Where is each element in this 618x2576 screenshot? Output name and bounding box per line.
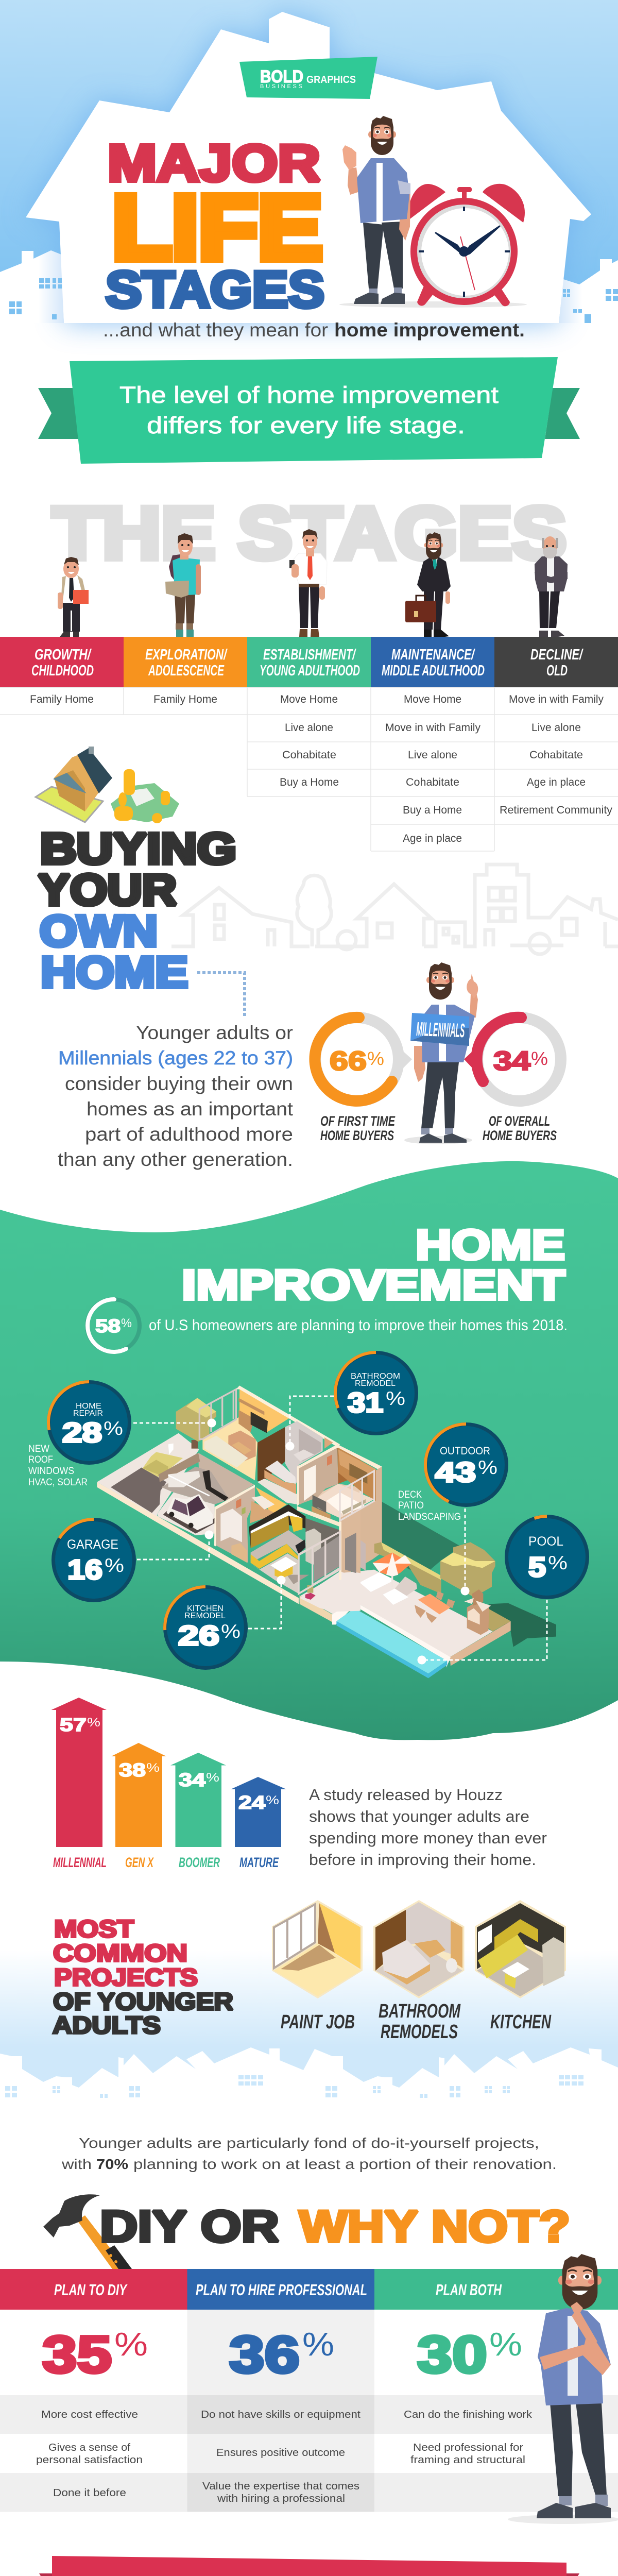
icon: house with money [36, 747, 179, 823]
bubble: bathroom remodel 31%: % [386, 1388, 405, 1409]
heading: Buying Your Own Home: HOME [41, 948, 188, 996]
table: stage housing options: Move Home [404, 693, 461, 705]
label: deck patio landscaping: DECK [398, 1489, 422, 1500]
paragraph: Houzz study: A study released by Houzz [309, 1786, 503, 1804]
logo: Bold Business Graphics: BOLD [260, 67, 303, 87]
paragraph: younger adults fond of DIY: with [61, 2156, 92, 2172]
character: man with Millennials sign [404, 962, 478, 1144]
bubble: home repair 28%: 28 [62, 1417, 102, 1448]
chart: 66% of first time home buyers: HOME BUYERS [320, 1128, 394, 1143]
table: stage headers: MAINTENANCE/ [391, 647, 475, 663]
heading: most common projects of younger adults [53, 1915, 233, 2039]
table: stage headers: OLD [546, 663, 568, 679]
table: stage headers: MIDDLE ADULTHOOD [382, 663, 485, 679]
heading: most common projects of younger adults: OF YOUNGER [53, 1988, 233, 2015]
table: stage housing options: Buy a Home [280, 776, 339, 788]
subtitle: home improvement. [334, 319, 525, 341]
table: stage headers: ADOLESCENCE [148, 663, 225, 679]
table: stage housing options: Buy a Home [403, 804, 462, 816]
heading: most common projects of younger adults: MOST [54, 1915, 134, 1942]
bubble: garage 16%: GARAGE [67, 1537, 118, 1552]
title: Major Life Stages: MAJOR [108, 134, 320, 192]
stat: 58% of homeowners: of U.S homeowners are planning to improve their homes this 2018. [149, 1317, 568, 1334]
chart: 66% of first time home buyers [315, 1018, 412, 1143]
skyline silhouette [0, 2047, 618, 2122]
character: waving man [342, 116, 410, 304]
bar: millennial 57%: 57 [60, 1714, 87, 1735]
paragraph: younger adults fond of DIY: Younger adults are particularly fond of do-it-yourself projects, [79, 2135, 539, 2151]
character: older man [535, 536, 568, 637]
icon: paint job room: PAINT JOB [281, 2011, 355, 2033]
table: stage headers [0, 637, 618, 687]
logo: Bold Business Graphics: GRAPHICS [306, 74, 356, 86]
heading: The Stages: THE STAGES [53, 493, 566, 574]
table: DIY comparison: 30 [417, 2326, 487, 2384]
paragraph: younger adults: consider buying their own [65, 1073, 293, 1094]
heading: most common projects of younger adults: COMMON [53, 1939, 187, 1967]
table: DIY comparison: 35 [42, 2326, 112, 2384]
bubble: kitchen remodel 26% [163, 1585, 248, 1670]
table: DIY comparison: PLAN TO HIRE PROFESSIONAL [196, 2281, 367, 2299]
bubble: bathroom remodel 31%: BATHROOM [351, 1372, 400, 1381]
bubble: outdoor 43%: 43 [435, 1457, 476, 1488]
paragraph: Houzz study [309, 1786, 547, 1869]
bubble: pool 5%: 5 [528, 1552, 546, 1583]
label: new roof windows hvac solar: WINDOWS [28, 1466, 74, 1477]
label: new roof windows hvac solar [28, 1444, 88, 1488]
bar: millennial 57%: MILLENNIAL [53, 1855, 107, 1870]
table: DIY comparison: framing and structural [410, 2454, 525, 2466]
table: DIY comparison: Ensures positive outcome [216, 2447, 345, 2459]
paragraph: Houzz study: before in improving their home. [309, 1851, 536, 1869]
banner: level of home improvement: The level of home improvement [119, 382, 499, 408]
chart: generation arrows bar chart [52, 1698, 286, 1870]
character: teen with backpack [165, 533, 201, 637]
table: stage headers: GROWTH/ [35, 647, 92, 663]
character: child [58, 557, 89, 637]
label: deck patio landscaping: PATIO [398, 1500, 424, 1511]
table: DIY comparison: % [114, 2326, 148, 2363]
table: stage headers: YOUNG ADULTHOOD [260, 663, 360, 679]
paragraph: Houzz study: spending more money than ever [309, 1829, 547, 1847]
chart: 34% of overall home buyers: % [531, 1048, 548, 1069]
bubble: kitchen remodel 26%: KITCHEN [187, 1604, 224, 1613]
chart: 34% of overall home buyers: OF OVERALL [489, 1113, 550, 1129]
table: stage housing options [0, 687, 618, 851]
bar: mature 24%: 24 [238, 1792, 265, 1813]
bar: boomer 34% [170, 1753, 226, 1870]
icon: bathroom room: BATHROOM [379, 2001, 461, 2022]
bar: boomer 34%: 34 [179, 1769, 205, 1790]
heading: DIY or why not: DIY OR [100, 2202, 279, 2251]
bar: mature 24% [231, 1777, 286, 1870]
subtitle [103, 319, 525, 341]
table: stage headers: CHILDHOOD [31, 663, 94, 679]
table: stage housing options: Move Home [280, 693, 338, 705]
header sky panel with house silhouette [0, 0, 618, 323]
bubble: home repair 28%: HOME [76, 1402, 101, 1411]
heading: Buying Your Own Home: OWN [40, 907, 158, 955]
bubble: pool 5%: % [548, 1552, 568, 1573]
bubble: home repair 28% [47, 1380, 131, 1465]
paragraph: younger adults [58, 1022, 294, 1170]
label: new roof windows hvac solar: ROOF [28, 1454, 53, 1465]
title: Major Life Stages [106, 134, 324, 318]
banner: level of home improvement: differs for every life stage. [147, 412, 465, 438]
chart: 66% of first time home buyers: % [367, 1048, 384, 1069]
table: DIY comparison: 36 [229, 2326, 300, 2384]
table: stage headers: EXPLORATION/ [145, 647, 228, 663]
background: sky gradient [0, 1950, 618, 2097]
title: Major Life Stages: LIFE [112, 177, 322, 278]
table: stage housing options: Live alone [285, 722, 333, 734]
bubble: pool 5%: POOL [528, 1534, 563, 1549]
table: DIY comparison: Need professional for [413, 2442, 523, 2453]
icon: kitchen room [475, 1900, 566, 2033]
label: deck patio landscaping: LANDSCAPING [398, 1512, 461, 1522]
table: DIY comparison: with hiring a professional [217, 2493, 345, 2504]
bar: gen x 38%: % [146, 1761, 160, 1775]
table: DIY comparison: % [489, 2326, 522, 2363]
bubble: outdoor 43%: OUTDOOR [440, 1445, 490, 1457]
bar: mature 24%: % [266, 1793, 279, 1807]
bar: mature 24%: MATURE [239, 1855, 279, 1870]
logo: Bold Business Graphics: BUSINESS [260, 83, 302, 90]
paragraph: younger adults: Millennials (ages 22 to 37) [58, 1047, 293, 1069]
icon: hammer [43, 2194, 132, 2269]
logo: Bold Business Graphics [239, 57, 377, 99]
table: stage housing options: Cohabitate [529, 749, 583, 761]
heading: Home Improvement: HOME [416, 1222, 565, 1268]
neighbourhood outline illustration [171, 865, 618, 954]
bar: gen x 38% [111, 1743, 166, 1870]
chart: 66% of first time home buyers: OF FIRST TIME [320, 1113, 396, 1129]
title: Major Life Stages: STAGES [106, 261, 324, 318]
dotted connector [197, 973, 245, 1018]
heading: Buying Your Own Home: YOUR [38, 866, 177, 914]
heading: Buying Your Own Home: BUYING [40, 824, 236, 873]
alarm clock illustration [339, 184, 527, 308]
stat: 58% of homeowners: 58 [95, 1315, 121, 1336]
bar: gen x 38%: GEN X [125, 1855, 154, 1870]
label: new roof windows hvac solar: HVAC, SOLAR [28, 1477, 88, 1488]
label: new roof windows hvac solar: NEW [28, 1444, 49, 1454]
table: stage housing options: Family Home [153, 693, 217, 705]
bubble: garage 16%: 16 [67, 1554, 102, 1585]
character: middle-aged man with briefcase [405, 532, 451, 637]
label: deck patio landscaping [398, 1489, 461, 1522]
bubble: pool 5% [505, 1515, 589, 1599]
paragraph: younger adults fond of DIY: planning to work on at least a portion of their renovation. [133, 2156, 557, 2172]
bar: millennial 57%: % [87, 1716, 100, 1730]
paragraph: younger adults: Younger adults or [136, 1022, 293, 1043]
table: DIY comparison: Do not have skills or equipment [201, 2409, 360, 2420]
table: DIY comparison: PLAN TO DIY [54, 2281, 128, 2299]
table: DIY comparison: personal satisfaction [36, 2454, 143, 2466]
connector dots [205, 1419, 470, 1664]
bubble: bathroom remodel 31% [334, 1351, 418, 1435]
heading: DIY or why not: WHY NOT? [299, 2202, 570, 2251]
table: DIY comparison: Can do the finishing work [404, 2409, 533, 2420]
bar: boomer 34%: BOOMER [179, 1855, 220, 1870]
table: DIY comparison: PLAN BOTH [436, 2281, 502, 2299]
paragraph: younger adults: than any other generation. [58, 1149, 293, 1170]
chart: 34% of overall home buyers: 34 [493, 1046, 530, 1076]
table: stage housing options: Age in place [527, 776, 586, 788]
bubble: garage 16% [52, 1518, 136, 1602]
stat: 58% of homeowners: % [121, 1316, 132, 1330]
chart: 34% of overall home buyers: HOME BUYERS [483, 1128, 557, 1143]
icon: kitchen room: KITCHEN [490, 2011, 552, 2033]
table: stage housing options: Move in with Family [509, 693, 604, 705]
character: thinking man [508, 2254, 618, 2524]
table: stage headers: ESTABLISHMENT/ [263, 647, 356, 663]
text: MILLENNIALS [416, 1019, 465, 1042]
icon: bathroom room [373, 1900, 465, 2043]
paragraph: Houzz study: shows that younger adults are [309, 1807, 529, 1825]
table: stage housing options: Live alone [531, 722, 581, 734]
subtitle: ...and what they mean for [103, 319, 328, 341]
banner: reason for home improvement [39, 2556, 579, 2576]
bubble: home repair 28%: REPAIR [73, 1409, 103, 1418]
table: stage housing options: Age in place [403, 833, 462, 844]
bubble: outdoor 43%: % [478, 1457, 497, 1478]
heading: Home Improvement: IMPROVEMENT [182, 1262, 565, 1309]
icon: bathroom room: REMODELS [381, 2021, 458, 2043]
table: DIY comparison: Gives a sense of [48, 2442, 130, 2453]
bubble: bathroom remodel 31%: REMODEL [355, 1379, 396, 1388]
heading: DIY or why not [100, 2202, 570, 2251]
table: DIY comparison: Done it before [53, 2487, 126, 2499]
paragraph: younger adults: part of adulthood more [85, 1124, 293, 1145]
bar: millennial 57% [52, 1698, 107, 1870]
paragraph: younger adults fond of DIY: 70% [96, 2156, 128, 2172]
table: stage housing options: Family Home [30, 693, 94, 705]
bubble: kitchen remodel 26%: REMODEL [184, 1612, 226, 1620]
dotted connectors [133, 1396, 547, 1660]
chart: 34% of overall home buyers [464, 1018, 561, 1143]
heading: most common projects of younger adults: PROJECTS [54, 1963, 198, 1991]
bubble: home repair 28%: % [104, 1418, 123, 1439]
table: stage housing options: Move in with Family [385, 722, 480, 734]
illustration: isometric house cutaway [97, 1385, 556, 1678]
table: DIY comparison: More cost effective [41, 2409, 138, 2420]
icon: paint job room [272, 1900, 363, 2033]
banner: level of home improvement [38, 357, 580, 464]
bubble: bathroom remodel 31%: 31 [348, 1387, 383, 1418]
chart: 66% of first time home buyers: 66 [330, 1046, 367, 1076]
paragraph: younger adults fond of DIY [61, 2135, 557, 2172]
bubble: outdoor 43% [424, 1422, 508, 1507]
table: DIY comparison: % [302, 2326, 334, 2363]
heading: Home Improvement [182, 1222, 565, 1309]
stat: 58% of homeowners [87, 1299, 568, 1352]
table: DIY comparison: Value the expertise that comes [202, 2481, 359, 2492]
bubble: garage 16%: % [105, 1555, 124, 1576]
table: stage housing options: Retirement Community [500, 804, 613, 816]
bar: boomer 34%: % [206, 1771, 219, 1785]
paragraph: younger adults: homes as an important [87, 1098, 294, 1120]
panel: home improvement background [0, 1161, 618, 1740]
table: DIY comparison [0, 2269, 618, 2512]
heading: Buying Your Own Home [38, 824, 236, 996]
table: stage housing options: Cohabitate [282, 749, 336, 761]
character: young adult with phone [289, 529, 327, 637]
heading: most common projects of younger adults: ADULTS [53, 2011, 161, 2039]
table: stage housing options: Live alone [408, 749, 457, 761]
table: stage housing options: Cohabitate [406, 776, 459, 788]
bubble: kitchen remodel 26%: 26 [178, 1620, 219, 1651]
table: stage headers: DECLINE/ [530, 647, 583, 663]
bubble: kitchen remodel 26%: % [221, 1621, 241, 1642]
bar: gen x 38%: 38 [119, 1759, 146, 1781]
